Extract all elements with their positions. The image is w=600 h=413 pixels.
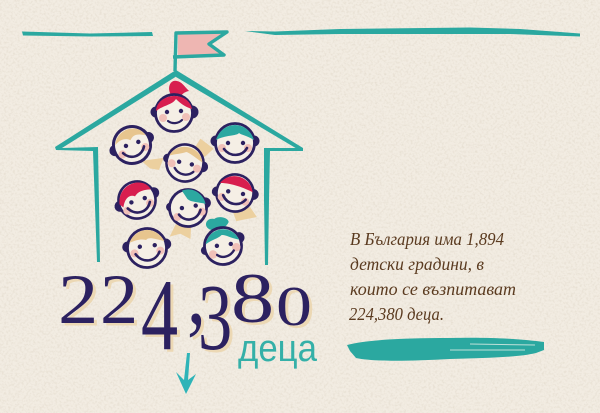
big number: 224,380: 0 [279, 277, 315, 340]
text block: детски градини, в [350, 254, 484, 274]
big number: 224,380: 3 [201, 268, 235, 372]
big number: 224,380: 4 [141, 259, 178, 372]
big number: 224,380: 2 [103, 263, 141, 341]
face: boy upper right with teal hair [210, 124, 260, 162]
text block: 224,380 деца. [349, 304, 444, 324]
big number: 224,380: 2 [100, 261, 138, 338]
face: bottom left blonde child [121, 226, 173, 270]
big number: 224,380: 3 [198, 265, 232, 370]
text block [349, 229, 516, 324]
big number: 224,380: 0 [276, 275, 312, 337]
text block: В България има 1,894 [350, 229, 504, 249]
big number: 224,380: , [187, 240, 206, 344]
face: centre child with blonde bow [159, 132, 215, 186]
face: top girl with red hair [150, 81, 198, 132]
icon: down arrow [176, 353, 196, 394]
brush stroke [347, 338, 544, 361]
big number: 224,380: , [190, 243, 209, 346]
label: деца: деца [238, 328, 318, 370]
house outline [55, 70, 303, 265]
big number: 224,380: 4 [144, 261, 181, 374]
text block: които се възпитават [350, 279, 516, 299]
top rule right [245, 28, 580, 36]
big number: 224,380: 2 [61, 263, 101, 341]
big number: 224,380: 2 [58, 261, 98, 339]
face: bottom right girl with teal hair [197, 214, 248, 267]
icon: flag [173, 32, 227, 71]
face: boy upper left [104, 119, 167, 183]
big number: 224,380: 8 [234, 263, 277, 341]
big number: 224,380 [58, 240, 315, 374]
face: child right with red hair and bow [206, 169, 266, 226]
face: child left with red hair [110, 176, 164, 224]
top rule left [22, 32, 153, 36]
big number: 224,380: 8 [231, 260, 274, 338]
face: centre lower child with teal hair and bow [162, 186, 217, 243]
